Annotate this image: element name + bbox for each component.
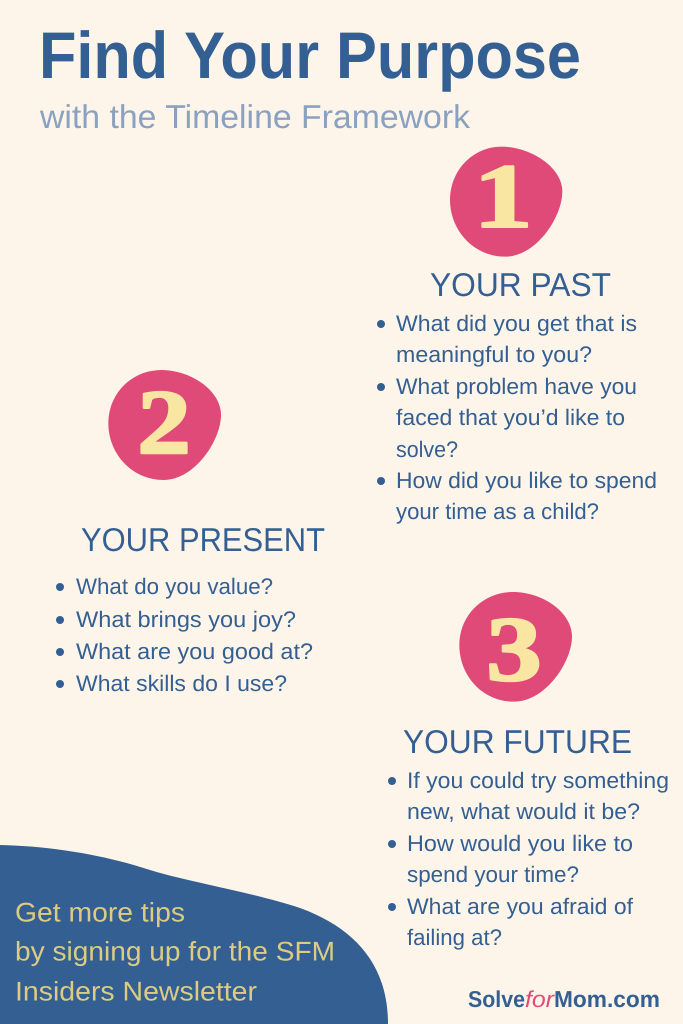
list: past questions: meaningful to you?: [396, 342, 592, 367]
logo: SolveforMom.com: [468, 986, 660, 1012]
footer blue shape: [0, 845, 388, 1024]
newsletter text: by signing up for the SFM: [15, 936, 335, 966]
panel: your past: [377, 145, 657, 524]
newsletter text: [15, 898, 335, 1006]
heading: your present: YOUR PRESENT: [81, 521, 325, 558]
list: present questions: What do you value?: [76, 574, 273, 599]
icon: number 1 badge: [450, 145, 562, 257]
list: past questions: faced that you’d like to: [396, 405, 625, 430]
list: future questions: spend your time?: [407, 862, 579, 887]
list: future questions: [388, 768, 669, 950]
newsletter text: Insiders Newsletter: [15, 976, 257, 1006]
icon: number 3 badge: 3: [486, 598, 542, 700]
newsletter text: Get more tips: [15, 898, 185, 928]
list: present questions: What skills do I use?: [76, 671, 287, 696]
list: future questions: If you could try something: [407, 768, 669, 793]
list: past questions: How did you like to spend: [396, 468, 657, 493]
list: past questions: [377, 311, 657, 524]
heading: your past: YOUR PAST: [430, 266, 611, 303]
list: past questions: What did you get that is: [396, 311, 637, 336]
icon: number 2 badge: [108, 370, 221, 480]
title: Find Your Purpose: [39, 18, 581, 92]
list: future questions: new, what would it be?: [407, 799, 640, 824]
subtitle: with the Timeline Framework: [39, 98, 471, 135]
list: present questions: What are you good at?: [76, 639, 313, 664]
heading: your future: YOUR FUTURE: [403, 723, 632, 760]
logo: SolveforMom.com: Solve: [468, 986, 525, 1012]
icon: number 2 badge: 2: [137, 371, 191, 473]
list: present questions: What brings you joy?: [76, 607, 296, 632]
icon: number 1 badge: 1: [473, 145, 533, 247]
list: past questions: your time as a child?: [396, 499, 599, 524]
list: future questions: How would you like to: [407, 831, 633, 856]
logo: SolveforMom.com: Mom.com: [554, 986, 660, 1012]
list: future questions: failing at?: [407, 925, 502, 950]
panel: newsletter callout: [0, 845, 388, 1024]
list: present questions: [56, 574, 313, 696]
list: past questions: What problem have you: [396, 374, 637, 399]
logo: SolveforMom.com: for: [525, 986, 555, 1012]
list: future questions: What are you afraid of: [407, 894, 634, 919]
panel: your future: [388, 592, 669, 950]
list: past questions: solve?: [396, 437, 458, 462]
panel: your present: [56, 370, 325, 696]
icon: number 3 badge: [459, 592, 572, 702]
